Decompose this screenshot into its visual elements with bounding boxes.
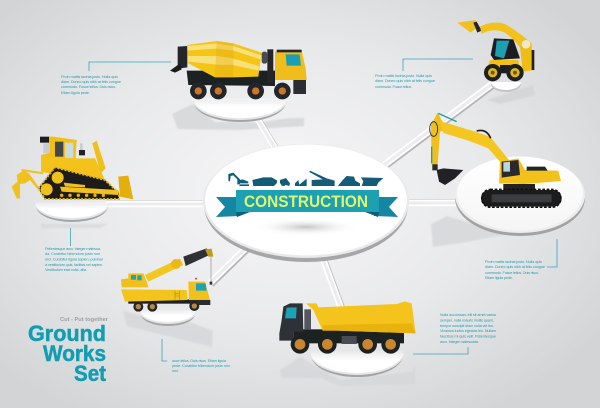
subheading: Cut - Put together [60,317,109,323]
vehicle: excavator [430,112,562,207]
text: excavator: Etiam ligula pede. [485,275,513,280]
title: Ground Works Set [28,321,107,386]
title: Ground Works Set: Ground [28,321,106,346]
text: excavator: Proin mattis lacinia justo. Nulla quis [485,259,542,264]
text: bulldozer: da. Curabitur bibendum justo non [45,251,100,256]
text: dump truck: faucibus mi quis velit. Pellentesque [440,334,496,338]
vehicle: skid steer loader [457,20,534,81]
ribbon banner [216,190,398,217]
text: bulldozer: Vestibulum erat nulla, alla. [45,267,87,272]
text: mixer: Etiam ligula pede. [61,90,90,95]
text: bulldozer [45,246,104,272]
text: dump truck: Nulla accumsan, elit sit amet varius [440,312,496,317]
text: bulldozer: Pellentesque arcu. Integer malesua- [45,246,102,251]
text: crane [172,358,230,373]
title: Ground Works Set: Works [43,341,106,366]
text: mixer: commodo. Fusce tellus. Duis risus. [61,84,116,89]
text: excavator: diam. Donec quis nibh at felis congue [485,264,545,269]
vehicle: bulldozer [12,137,133,199]
platform: mixer [193,98,287,122]
text: bulldozer: a vestibulum quis, facilisis vel sapien. [45,262,103,267]
text: crane: orci. [172,368,179,373]
text: excavator: commodo. Fusce tellus. Duis risus. [485,270,539,275]
connectors [106,84,493,309]
platform: skid steer [491,82,521,92]
title: Ground Works Set: Set [74,361,107,386]
ground shadows [40,85,535,386]
text: bulldozer: orci. Curabitur ligula sapien, pulvinar [45,256,104,262]
platform: crane [140,310,196,326]
central platform [203,144,409,262]
platform: bulldozer [35,202,109,222]
text: dump truck: tempor suscipit diam nulla vel leo. [440,323,494,328]
text: dump truck [440,312,496,344]
text: crane: pede. Curabitur bibendum justo non [172,363,230,368]
vehicle: dump truck [279,301,416,354]
vehicle: crane truck [121,248,213,312]
central silhouettes [228,171,383,186]
text: skid steer: Proin mattis lacinia justo. Nulla quis [375,73,432,78]
text: skid steer [375,73,435,89]
text: dump truck: Vivamus luctus egestas leo. Nullam [440,328,496,333]
text: mixer: diam. Donec quis nibh at felis congue [61,79,121,84]
ribbon title: CONSTRUCTION [244,193,368,211]
leader lines [70,59,557,361]
text: excavator [485,259,545,280]
vehicle: concrete mixer truck [170,41,307,99]
text: mixer [61,74,121,95]
platform: excavator [455,156,585,236]
text: dump truck: semper, nulla mauris mollis quam, [440,318,494,322]
platform: dump truck [310,351,404,377]
text: skid steer: commodo. Fusce tellus. [375,84,412,89]
text: dump truck: arcu. Integer malesuada. [440,339,479,344]
text: skid steer: diam. Donec quis nibh at felis congue [375,78,435,83]
text: mixer: Proin mattis lacinia justo. Nulla quis [61,74,118,79]
text: crane: usce tellus. Duis risus. Etiam ligula [172,358,227,363]
